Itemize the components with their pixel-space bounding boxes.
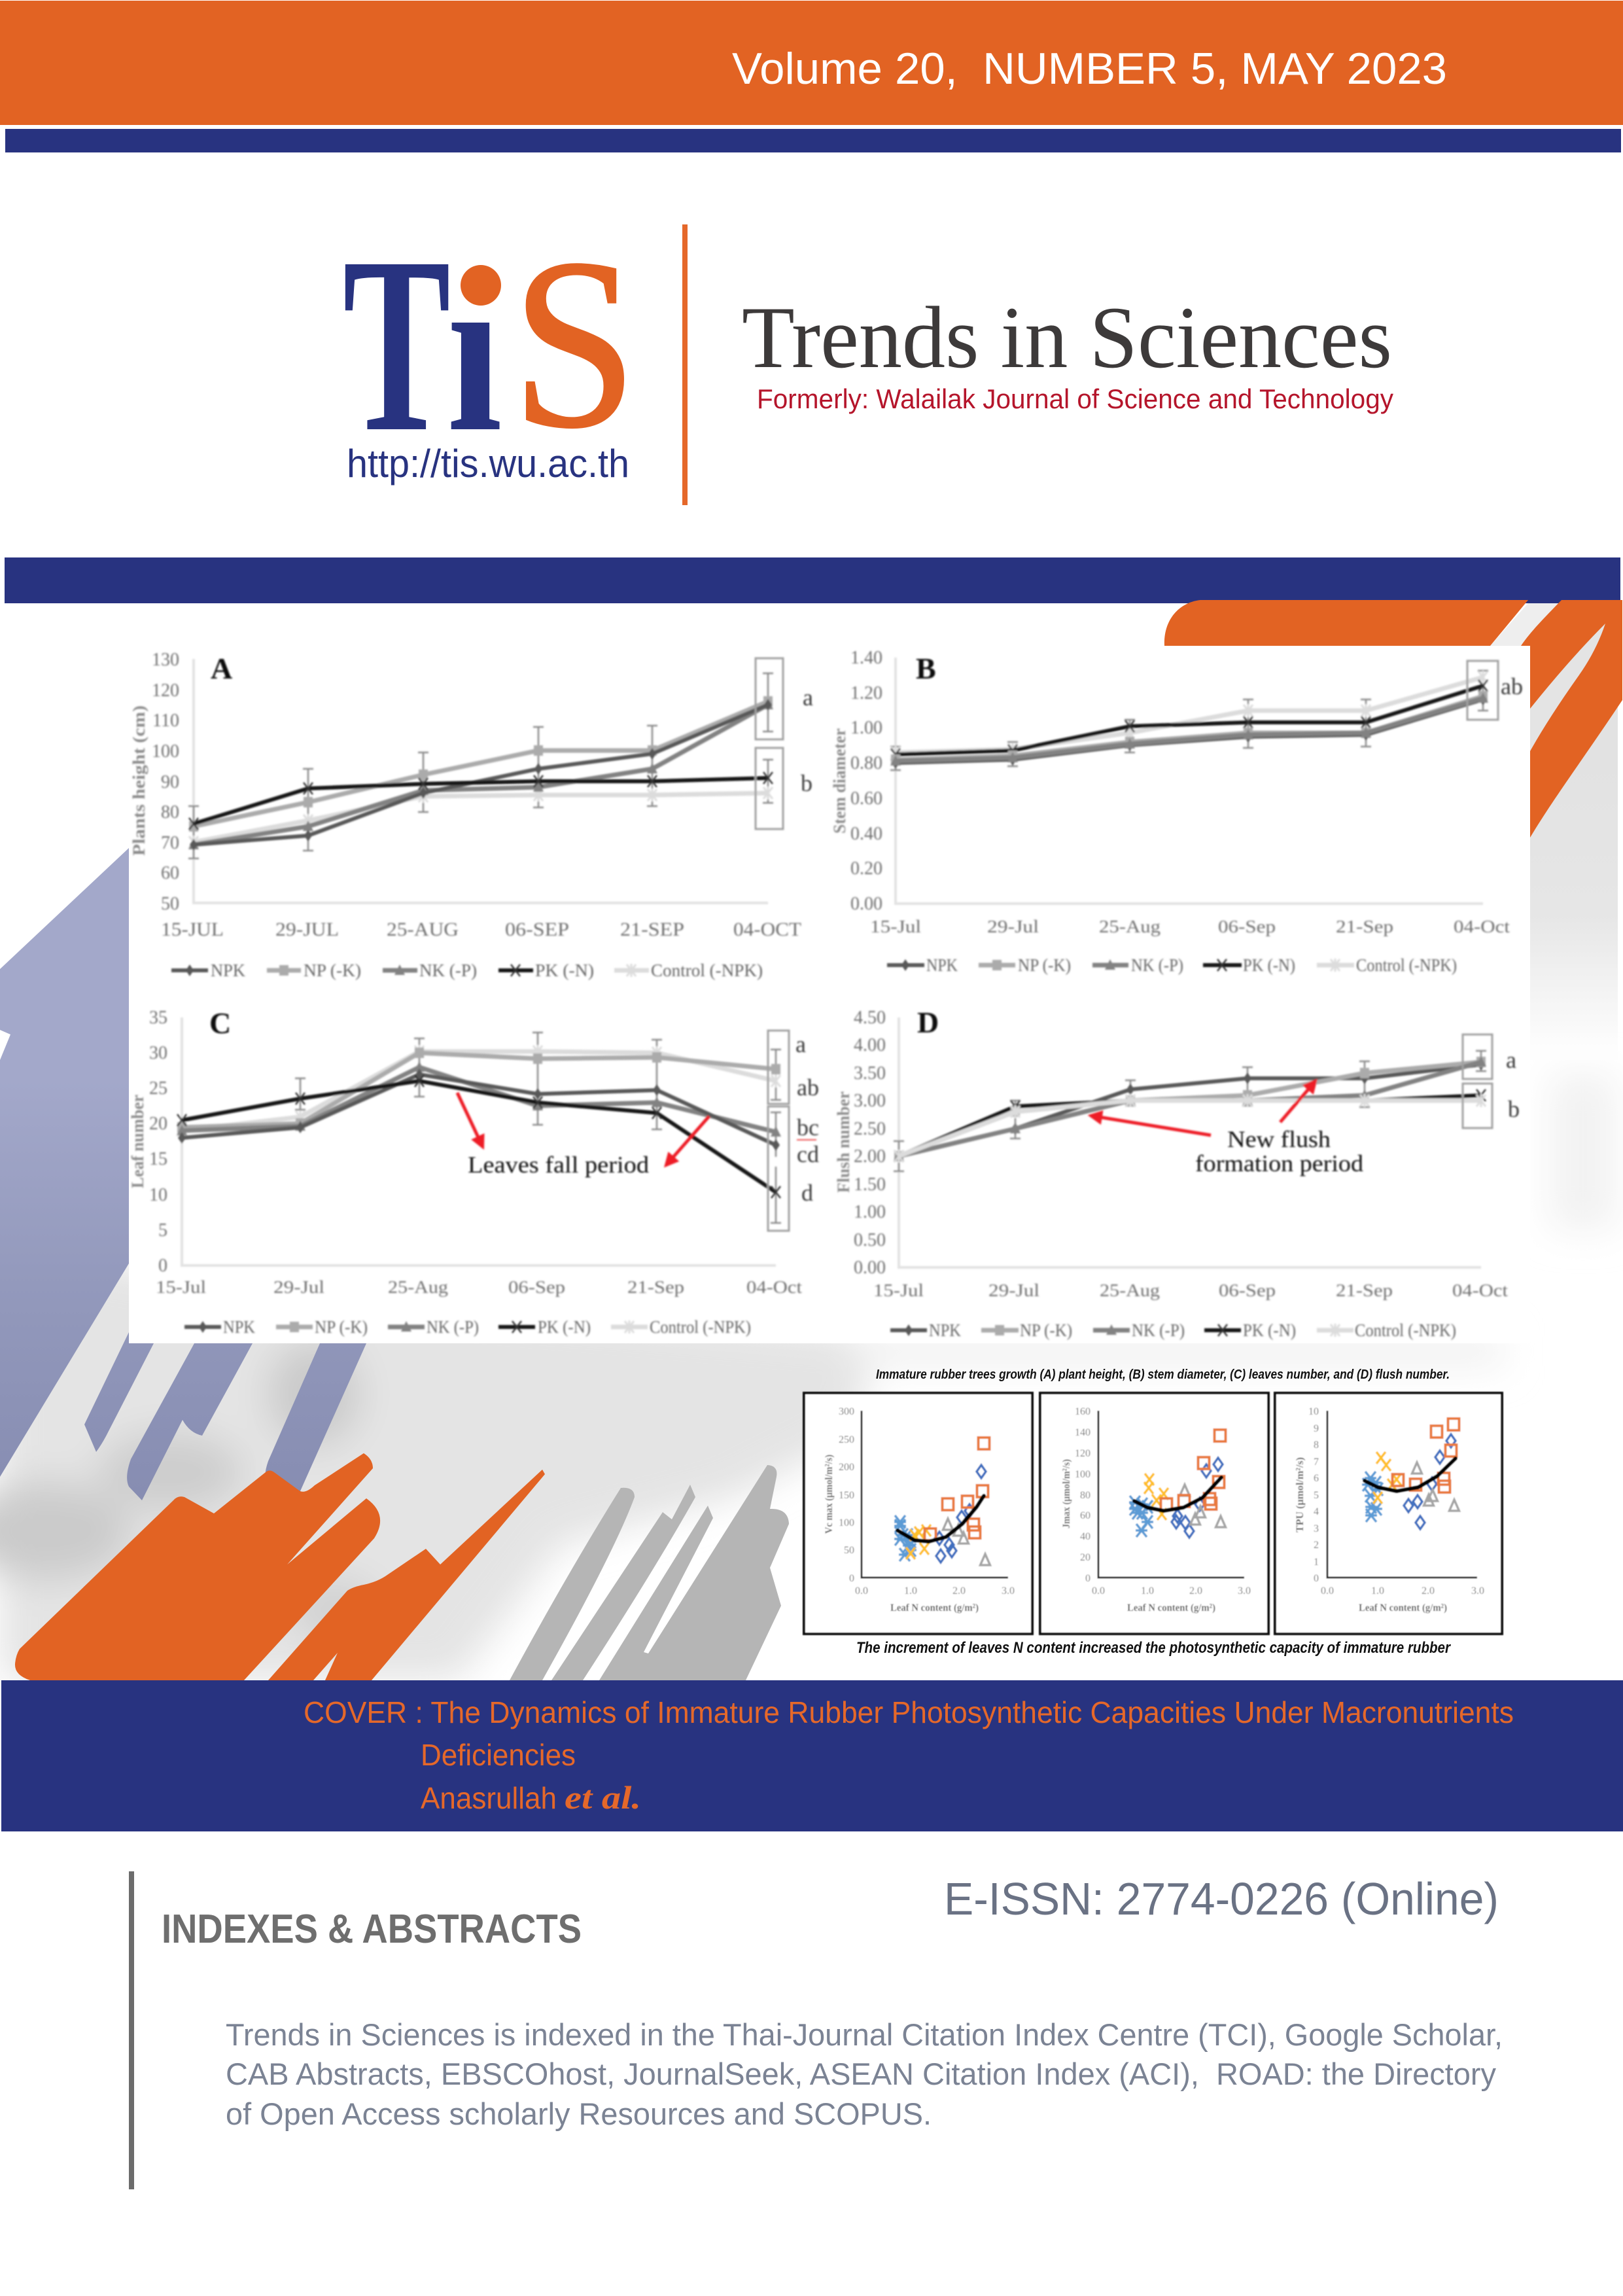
TiS logo <box>343 205 637 486</box>
legend C <box>184 1317 751 1337</box>
orange lower-left brush strokes <box>15 1453 545 1680</box>
chart A: plant height: 04-OCT <box>733 919 801 940</box>
chart D: flush number: 06-Sep <box>1219 1280 1276 1300</box>
chart B: stem diameter: 1.00 <box>850 718 882 738</box>
chart A: plant height: Plants height (cm) <box>130 705 148 856</box>
scatter panel: TPU: 1.0 <box>1371 1585 1384 1597</box>
chart C: leaf number: 25-Aug <box>388 1277 448 1297</box>
gray brush background <box>0 1073 1616 1680</box>
legend A <box>171 961 763 980</box>
legend B: NPK <box>926 955 958 975</box>
periwinkle brush strokes <box>0 848 366 1500</box>
legend C: NPK <box>223 1317 255 1337</box>
chart B: stem diameter: B <box>916 652 936 685</box>
scatter panel: TPU: 10 <box>1308 1406 1319 1417</box>
navy separator band <box>5 557 1620 603</box>
legend C: PK (-N) <box>538 1317 591 1337</box>
chart D: flush number: 3.50 <box>854 1063 886 1084</box>
scatter panel: Vc max: 0.0 <box>855 1585 868 1597</box>
chart B: stem diameter: 0.00 <box>850 894 882 914</box>
photosynthesis figure caption: The increment of leaves N content increased the photosynthetic capacity of immature rubber <box>856 1639 1451 1657</box>
legend C: NP (-K) <box>315 1317 368 1337</box>
orange top-right brush strokes <box>1164 600 1622 838</box>
logo url: http://tis.wu.ac.th <box>347 442 629 486</box>
scatter panel: Vc max: 3.0 <box>1002 1585 1015 1597</box>
scatter panel: TPU <box>1275 1393 1502 1634</box>
chart C: leaf number: 10 <box>149 1185 167 1205</box>
legend A: NPK <box>211 961 245 980</box>
legend D: NP (-K) <box>1020 1320 1072 1340</box>
chart A: plant height: 25-AUG <box>387 919 459 940</box>
chart C: leaf number: 15 <box>149 1149 167 1169</box>
chart C: leaf number: 29-Jul <box>273 1277 324 1297</box>
scatter panel: J max: 120 <box>1075 1448 1091 1459</box>
legend D <box>890 1320 1456 1340</box>
chart C: leaf number: 25 <box>149 1078 167 1099</box>
chart B: stem diameter: 1.20 <box>850 683 882 703</box>
chart C: leaf number: C <box>209 1006 231 1040</box>
chart B: stem diameter: 0.20 <box>850 858 882 879</box>
scatter panel: Vc max: 150 <box>839 1490 854 1501</box>
chart B: stem diameter: 0.40 <box>850 824 882 844</box>
chart C: leaf number: 04-Oct <box>746 1277 803 1297</box>
TiS logo: ı <box>447 222 502 480</box>
leaves fall annotation: Leaves fall period <box>468 1152 649 1178</box>
growth figure caption: Immature rubber trees growth (A) plant height, (B) stem diameter, (C) leaves number, and (D) flush number. <box>876 1368 1450 1382</box>
scatter panel: TPU: 3 <box>1314 1523 1319 1534</box>
chart B: stem diameter <box>830 648 1523 975</box>
chart D: flush number: 3.00 <box>854 1091 886 1111</box>
chart A: plant height: 06-SEP <box>505 919 569 940</box>
legend A: NK (-P) <box>419 961 477 980</box>
scatter panel: TPU: TPU (µmol/m²/s) <box>1295 1457 1306 1532</box>
chart C: leaf number: 35 <box>149 1008 167 1028</box>
chart C: leaf number: 5 <box>158 1220 167 1241</box>
chart A: plant height: 80 <box>161 802 179 822</box>
scatter panel: Vc max: 50 <box>844 1545 854 1556</box>
scatter panel: J max <box>1040 1393 1268 1634</box>
legend D: NK (-P) <box>1132 1320 1185 1340</box>
chart C: leaf number: 0 <box>158 1256 167 1276</box>
scatter panel: J max: Leaf N content (g/m²) <box>1127 1602 1215 1614</box>
cover story title line two: Deficiencies <box>421 1738 576 1772</box>
chart C: leaf number: a <box>795 1031 806 1057</box>
scatter panel: TPU: 2.0 <box>1422 1585 1435 1597</box>
scatter panel: TPU: 1 <box>1314 1557 1319 1568</box>
scatter panel: J max: 3.0 <box>1238 1585 1251 1597</box>
indexes heading: INDEXES & ABSTRACTS <box>162 1907 582 1952</box>
cover story title: COVER : The Dynamics of Immature Rubber Photosynthetic Capacities Under Macronutrients <box>304 1695 1514 1729</box>
chart D: flush number: 2.50 <box>854 1119 886 1139</box>
chart C: leaf number: 15-Jul <box>156 1277 206 1297</box>
scatter panel: J max: 1.0 <box>1141 1585 1154 1597</box>
chart A: plant height: a <box>803 684 813 711</box>
leaves fall annotation <box>457 1093 709 1178</box>
journal title: Trends in Sciences <box>742 289 1392 387</box>
E-ISSN: E-ISSN: 2774-0226 (Online) <box>944 1873 1499 1924</box>
scatter panel: TPU: 4 <box>1314 1506 1319 1517</box>
chart B: stem diameter: 06-Sep <box>1218 917 1276 936</box>
legend D: NPK <box>929 1320 961 1340</box>
scatter panel: Vc max: Leaf N content (g/m²) <box>890 1602 979 1614</box>
legend C: Control (-NPK) <box>650 1317 751 1337</box>
orange divider <box>682 224 688 505</box>
scatter panel: TPU: 7 <box>1314 1457 1319 1468</box>
chart B: stem diameter: 0.60 <box>850 788 882 809</box>
legend A: PK (-N) <box>535 961 594 980</box>
chart D: flush number: 2.00 <box>854 1146 886 1167</box>
chart C: leaf number: bc <box>797 1114 819 1140</box>
scatter panel: J max: Jmax (µmol/m²/s) <box>1061 1459 1072 1528</box>
indexing paragraph: Trends in Sciences is indexed in the Thai-Journal Citation Index Centre (TCI), Google Scholar, <box>226 2017 1503 2052</box>
chart A: plant height: 120 <box>152 680 179 701</box>
chart D: flush number: 25-Aug <box>1100 1280 1160 1300</box>
indexing paragraph <box>226 2017 1503 2131</box>
issue information: Volume 20, NUMBER 5, MAY 2023 <box>732 44 1447 94</box>
new flush annotation <box>1091 1081 1363 1176</box>
scatter panel: Vc max: 2.0 <box>952 1585 966 1597</box>
chart C: leaf number: cd <box>797 1141 819 1167</box>
chart C: leaf number: 20 <box>149 1114 167 1134</box>
new flush annotation: formation period <box>1195 1150 1363 1176</box>
scatter panel: J max: 60 <box>1080 1510 1091 1521</box>
chart C: leaf number <box>128 1006 819 1337</box>
chart D: flush number: a <box>1506 1047 1516 1073</box>
scatter panel: TPU: 3.0 <box>1471 1585 1484 1597</box>
vertical gray bar <box>129 1871 134 2189</box>
chart B: stem diameter: 1.40 <box>850 648 882 668</box>
scatter panel: J max: 2.0 <box>1189 1585 1202 1597</box>
scatter panel: J max: 40 <box>1080 1531 1091 1542</box>
chart B: stem diameter: 29-Jul <box>987 917 1039 936</box>
chart D: flush number: 21-Sep <box>1336 1280 1393 1300</box>
scatter panel: J max: 160 <box>1075 1406 1091 1417</box>
chart D: flush number: 04-Oct <box>1452 1280 1509 1300</box>
scatter panel: Vc max: Vc max (µmol/m²/s) <box>824 1455 835 1534</box>
scatter panel: TPU: 2 <box>1314 1540 1319 1551</box>
indexing paragraph: of Open Access scholarly Resources and SCOPUS. <box>226 2096 932 2131</box>
new flush annotation: New flush <box>1227 1126 1331 1152</box>
scatter panel: Vc max: 250 <box>839 1434 854 1445</box>
chart B: stem diameter: Stem diameter <box>830 728 849 834</box>
scatter panel: TPU: Leaf N content (g/m²) <box>1359 1602 1447 1614</box>
chart B: stem diameter: 0.80 <box>850 753 882 773</box>
chart A: plant height: 50 <box>161 894 179 914</box>
scatter panel: TPU: 0.0 <box>1321 1585 1334 1597</box>
chart D: flush number: 4.50 <box>854 1008 886 1028</box>
chart A: plant height: 21-SEP <box>620 919 684 940</box>
chart A: plant height: b <box>801 770 812 796</box>
scatter panel: TPU: 8 <box>1314 1439 1319 1451</box>
chart D: flush number: 29-Jul <box>988 1280 1039 1300</box>
chart A: plant height: 110 <box>152 711 179 731</box>
chart B: stem diameter: 21-Sep <box>1336 917 1393 936</box>
chart D: flush number: 15-Jul <box>873 1280 924 1300</box>
chart A: plant height: 130 <box>152 650 179 670</box>
scatter panel: TPU: 0 <box>1314 1573 1319 1584</box>
chart D: flush number: 0.50 <box>854 1230 886 1250</box>
chart C: leaf number: d <box>801 1180 813 1206</box>
chart D: flush number: 1.00 <box>854 1202 886 1222</box>
chart A: plant height <box>130 650 813 980</box>
legend B: NP (-K) <box>1018 955 1071 975</box>
scatter panel: J max: 0 <box>1085 1573 1091 1584</box>
cover story authors <box>421 1779 641 1816</box>
white chart panel <box>129 646 1530 1343</box>
TiS logo: S <box>512 209 637 478</box>
scatter panel: Vc max: 300 <box>839 1406 854 1417</box>
cover story authors: Anasrullah <box>421 1781 557 1815</box>
cover story band <box>1 1680 1623 1831</box>
scatter panel: Vc max <box>804 1393 1032 1634</box>
chart C: leaf number: Leaf number <box>128 1095 147 1188</box>
TiS logo: T <box>343 205 451 484</box>
chart C: leaf number: ab <box>797 1074 819 1101</box>
legend C: NK (-P) <box>427 1317 479 1337</box>
chart D: flush number: 4.00 <box>854 1035 886 1055</box>
chart D: flush number: 1.50 <box>854 1174 886 1195</box>
scatter panel: Vc max: 1.0 <box>904 1585 917 1597</box>
chart A: plant height: 90 <box>161 772 179 792</box>
scatter panel: TPU: 5 <box>1314 1490 1319 1501</box>
gray lower brush strokes <box>510 1465 789 1680</box>
legend B: PK (-N) <box>1243 955 1295 975</box>
chart C: leaf number: 30 <box>149 1043 167 1063</box>
scatter panel: Vc max: 200 <box>839 1462 854 1473</box>
legend A: Control (-NPK) <box>651 961 763 980</box>
chart B: stem diameter: 15-Jul <box>870 917 921 936</box>
chart B: stem diameter: 25-Aug <box>1099 917 1161 936</box>
scatter panel: J max: 140 <box>1075 1427 1091 1438</box>
legend D: Control (-NPK) <box>1355 1320 1456 1340</box>
legend A: NP (-K) <box>304 961 361 980</box>
indexing paragraph: CAB Abstracts, EBSCOhost, JournalSeek, ASEAN Citation Index (ACI), ROAD: the Directory <box>226 2057 1496 2091</box>
chart A: plant height: 60 <box>161 863 179 883</box>
scatter panel: TPU: 6 <box>1314 1473 1319 1484</box>
chart C: leaf number: 21-Sep <box>627 1277 684 1297</box>
chart A: plant height: 29-JUL <box>275 919 339 940</box>
scatter panel: J max: 80 <box>1080 1490 1091 1501</box>
chart B: stem diameter: 04-Oct <box>1454 917 1510 936</box>
chart A: plant height: A <box>211 652 232 685</box>
legend D: PK (-N) <box>1243 1320 1296 1340</box>
scatter panel: J max: 0.0 <box>1092 1585 1105 1597</box>
scatter panel: Vc max: 0 <box>849 1573 854 1584</box>
chart D: flush number: Flush number <box>834 1091 853 1193</box>
legend B: NK (-P) <box>1131 955 1183 975</box>
legend B: Control (-NPK) <box>1356 955 1457 975</box>
chart D: flush number: 0.00 <box>854 1258 886 1278</box>
chart D: flush number: b <box>1508 1096 1520 1122</box>
legend B <box>887 955 1457 975</box>
chart A: plant height: 100 <box>152 741 179 762</box>
scatter panel: J max: 20 <box>1080 1552 1091 1563</box>
chart B: stem diameter: ab <box>1501 673 1523 699</box>
cover story authors: et al. <box>565 1779 641 1816</box>
chart A: plant height: 70 <box>161 833 179 853</box>
scatter panel: TPU: 9 <box>1314 1423 1319 1434</box>
scatter panel: J max: 100 <box>1075 1469 1091 1480</box>
right gray column <box>1530 694 1618 1060</box>
header band <box>0 1 1623 152</box>
former journal name: Formerly: Walailak Journal of Science and Technology <box>757 383 1393 414</box>
chart D: flush number: D <box>917 1006 939 1039</box>
scatter panel: Vc max: 100 <box>839 1517 854 1528</box>
chart D: flush number <box>834 1006 1520 1340</box>
chart C: leaf number: 06-Sep <box>508 1277 565 1297</box>
chart A: plant height: 15-JUL <box>161 919 224 940</box>
